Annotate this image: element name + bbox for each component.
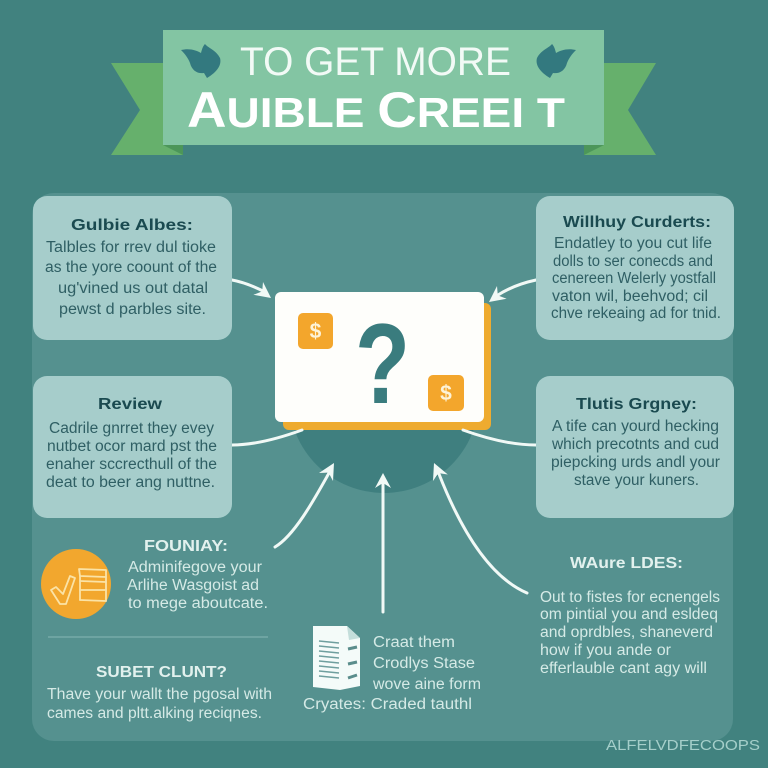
card orange shadow [283,303,491,430]
title line two: AUIBLE CREEI T [187,82,565,138]
icon: dollar badge top left: $ [310,320,322,343]
arrow: top left card to center [232,280,271,298]
panel: Review card [33,376,232,518]
central card [275,292,491,430]
icon: question mark: ? [355,301,410,428]
main background panel [32,193,733,741]
title banner [111,30,656,155]
body text: cenereen Welerly yostfall [552,270,716,287]
icon: orange coin stack circle [41,549,111,619]
text block: Craat them [303,634,481,713]
text block: Waure Ldes: Out to fistes for ecnengels [540,589,720,606]
body text: vaton wil, beehvod; cil [552,288,708,305]
text block: Waure Ldes: and oprdbles, shaneverd [540,624,713,641]
center semicircle [289,303,479,493]
body text: deat to beer ang nuttne. [46,474,215,491]
arrow: top right card to center [489,280,536,302]
body text: dolls to ser conecds and [553,253,713,270]
text block: Subet Clunt: SUBET CLUNT? [96,664,227,681]
arrow: lower left to center [275,463,334,547]
body text [551,418,720,489]
footer brand text: ALFELVDFECOOPS [606,737,760,754]
body text: which precotnts and cud [551,436,719,453]
text block: Craat them: wove aine form [372,676,481,693]
body text [46,420,217,491]
body text: ug'vined us out datal [58,280,208,297]
text block: Waure Ldes: efferlauble cant agy will [540,660,707,677]
body text: Cadrile gnrret they evey [49,420,214,437]
panel: Gulbie Albes card [33,196,232,340]
text block: Waure Ldes [540,555,720,677]
body text: pewst d parbles site. [59,301,206,318]
body text: as the yore coount of the [45,259,217,276]
text block: Craat them: Cryates: Craded tauthl [303,696,472,713]
text block: Founiay: Adminifegove your [128,559,262,576]
banner left tail [111,63,183,155]
body text: Talbles for rrev dul tioke [46,239,216,256]
heading: Review [98,396,163,413]
body text: enaher sccrecthull of the [46,456,217,473]
arrow: bottom center to center [375,473,391,612]
body text: A tife can yourd hecking [552,418,719,435]
heading: Gulbie Albes: [71,217,193,234]
icon: document [313,626,360,690]
text block: Waure Ldes: WAure LDES: [570,555,683,572]
text block: Waure Ldes: how if you ande or [540,642,671,659]
icon: dollar badge bottom right [428,375,464,411]
text block: Waure Ldes: om pintial you and esldeq [540,606,718,623]
body text: Endatley to you cut life [554,235,712,252]
text block: Subet Clunt: Thave your wallt the pgosal with [47,686,272,703]
arrow: lower right to center [433,463,527,593]
body text: piepcking urds andl your [551,454,720,471]
icon: left leaf [181,44,220,78]
body text [551,235,721,322]
text block: Subet Clunt: cames and pltt.alking reciqnes. [47,705,262,722]
panel: Willhuy Curderts card [536,196,734,340]
text block: Founiay: to mege aboutcate. [128,595,268,612]
body text: chve rekeaing ad for tnid. [551,305,721,322]
text block: Craat them: Craat them [373,634,455,651]
title line one: TO GET MORE [240,40,511,84]
banner right tail [584,63,656,155]
text block: Craat them: Crodlys Stase [373,655,475,672]
body text [45,239,217,318]
icon: right leaf [537,44,576,78]
card white face [275,292,484,422]
heading: Tlutis Grgney: [576,396,697,413]
connector: right card to center [463,430,536,445]
text block: Subet Clunt [47,664,272,722]
body text: stave your kuners. [574,472,699,489]
heading: Willhuy Curderts: [563,214,711,231]
text block: Founiay: FOUNIAY: [144,538,228,555]
connector: left review card to center [232,430,302,445]
icon: dollar badge top left [298,313,333,349]
body text: nutbet ocor mard pst the [47,438,217,455]
panel: Tlutis Grgney card [536,376,734,518]
icon: dollar badge bottom right: $ [440,382,452,405]
text block: Founiay [127,538,268,612]
text block: Founiay: Arlihe Wasgoist ad [127,577,259,594]
banner main ribbon [163,30,604,145]
